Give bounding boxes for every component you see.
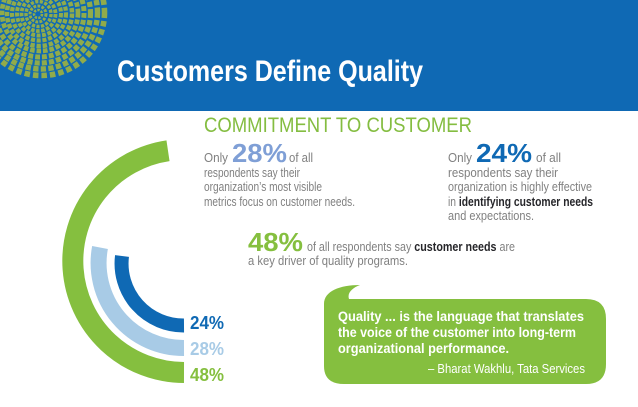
callout: quote bubble	[324, 285, 606, 384]
quote text: Quality ... is the language that translates	[338, 308, 584, 324]
quote text: organizational performance.	[338, 340, 509, 356]
text block: 24% stat: of all	[536, 151, 561, 165]
chart labels	[190, 313, 224, 385]
header band	[0, 0, 638, 111]
bubble shape	[324, 285, 606, 384]
quote text	[338, 308, 584, 356]
text block: 28% stat: of all	[289, 151, 313, 165]
text block: 28% stat: Only	[204, 151, 229, 165]
text block: 24% stat: Only	[448, 151, 473, 165]
text block: 48% stat: of all respondents say customer needs are	[307, 240, 515, 254]
label 28%: 28%	[190, 339, 224, 359]
label 24%: 24%	[190, 313, 224, 333]
icon: sunflower seed spiral	[0, 0, 104, 76]
heading: commitment to customer: COMMITMENT TO CUSTOMER	[204, 114, 472, 137]
arc: 24%	[122, 256, 184, 326]
arc: 28%	[99, 248, 184, 348]
big number 24%: 24%	[476, 138, 532, 168]
chart: concentric arcs	[73, 151, 184, 372]
big number 48%: 48%	[248, 227, 303, 257]
text block: 24% stat: in identifying customer needs	[448, 195, 593, 209]
text block: 24% stat: and expectations.	[448, 209, 534, 223]
text block: 48% stat	[248, 227, 515, 268]
quote text: the voice of the customer into long-term	[338, 324, 576, 340]
quote attribution: – Bharat Wakhlu, Tata Services	[428, 362, 585, 376]
big number 28%: 28%	[232, 138, 287, 168]
text block: 28% stat: organization’s most visible	[204, 180, 322, 194]
text block: 28% stat: respondents say their	[204, 166, 300, 180]
title: Customers Define Quality	[117, 55, 423, 88]
label 48%: 48%	[190, 365, 224, 385]
text block: 24% stat: respondents say their	[448, 166, 558, 180]
text block: 24% stat: organization is highly effective	[448, 180, 592, 194]
text block: 28% stat	[204, 138, 355, 209]
text block: 48% stat: a key driver of quality programs.	[248, 254, 408, 268]
text block: 28% stat: metrics focus on customer needs.	[204, 195, 355, 209]
text block: 24% stat	[448, 138, 593, 223]
arc: 48%	[73, 151, 184, 372]
